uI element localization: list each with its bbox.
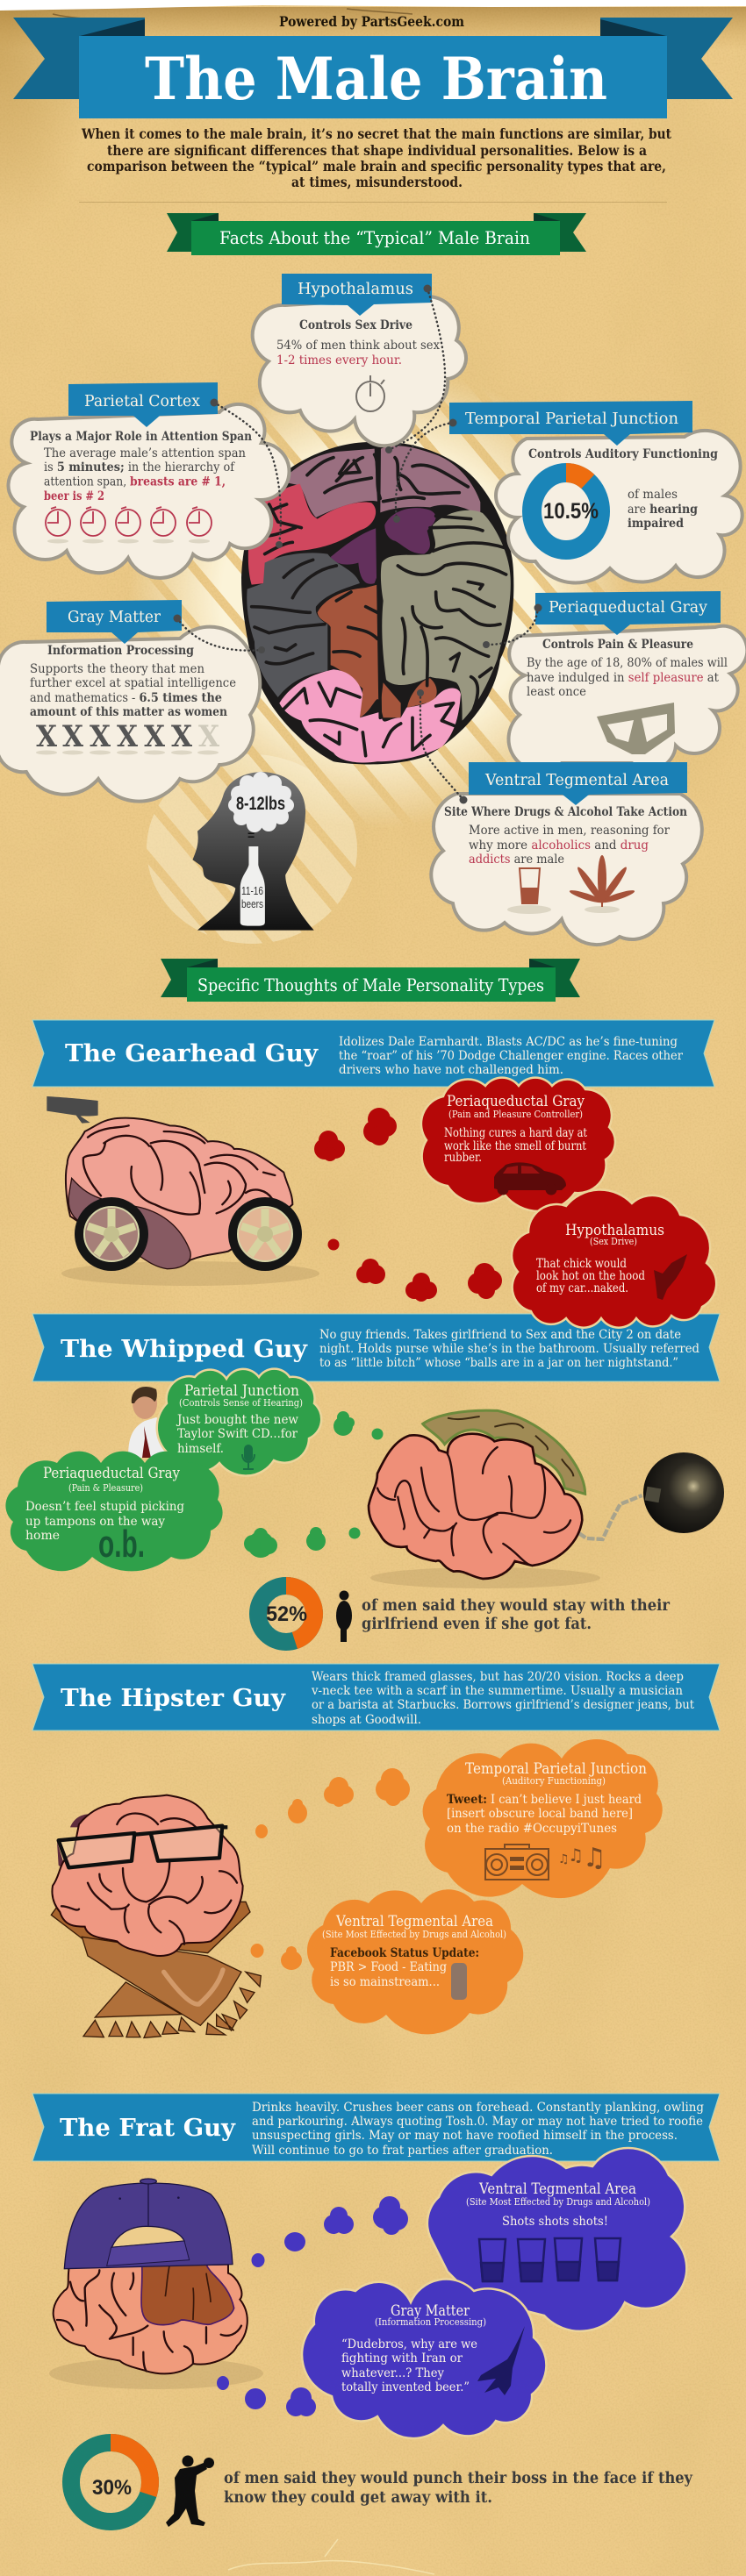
thought bubbles bbox=[217, 2196, 408, 2416]
intro text: there are significant differences that shape individual personalities. Below is a bbox=[107, 142, 647, 159]
intro text: When it comes to the male brain, it’s no secret that the main functions are similar, but bbox=[81, 125, 672, 142]
icon: row of X chromosomes: X bbox=[198, 719, 220, 754]
icon: reclining woman silhouette bbox=[654, 1254, 687, 1300]
thought cloud: periaqueductal gray: work like the smell of burnt bbox=[444, 1139, 586, 1153]
heading: The Frat Guy bbox=[60, 2114, 236, 2142]
donut chart: 30% bbox=[71, 2443, 150, 2522]
description: the “roar” of his ’70 Dodge Challenger engine. Races other bbox=[339, 1049, 683, 1063]
description: Drinks heavily. Crushes beer cans on forehead. Constantly planking, owling bbox=[252, 2101, 704, 2115]
thought cloud: ventral tegmental area: Ventral Tegmental Area bbox=[478, 2180, 636, 2198]
thought cloud: ventral tegmental area bbox=[427, 2148, 686, 2331]
icon: shot glass bbox=[507, 868, 551, 914]
diagonal stripes behind brain bbox=[137, 383, 618, 944]
panel: the whipped guy bbox=[5, 1314, 724, 1642]
panel: gray matter: and mathematics - 6.5 times the bbox=[30, 691, 222, 705]
icon: row of X chromosomes: X bbox=[144, 719, 166, 754]
right wheel bbox=[228, 1197, 302, 1271]
heading: The Whipped Guy bbox=[61, 1335, 308, 1363]
head silhouette: brain weight vs beers: 11-16 bbox=[241, 884, 263, 897]
panel: ventral tegmental area: More active in men, reasoning for bbox=[469, 824, 671, 838]
thought cloud: ventral tegmental area: PBR > Food - Eating bbox=[330, 1960, 447, 1974]
icon: o.b. logo: o.b. bbox=[98, 1523, 145, 1566]
panel: gray matter: Information Processing bbox=[47, 644, 195, 658]
statistic text: of men said they would punch their boss in the face if they bbox=[224, 2470, 693, 2487]
panel: temporal parietal junction: of males bbox=[628, 488, 678, 502]
panel: temporal parietal junction: Temporal Parietal Junction bbox=[465, 410, 678, 428]
thought cloud: hypothalamus: Hypothalamus bbox=[565, 1222, 664, 1239]
icon: stopwatch bbox=[356, 375, 384, 411]
intro text: at times, misunderstood. bbox=[291, 174, 463, 190]
panel: parietal cortex bbox=[8, 382, 289, 578]
panel: periaqueductal gray bbox=[509, 591, 746, 771]
thought cloud: gray matter: Gray Matter bbox=[391, 2302, 470, 2320]
icon: cannabis leaf bbox=[569, 855, 635, 913]
thought cloud: gray matter: totally invented beer.” bbox=[341, 2380, 470, 2394]
icon: beer can bbox=[451, 1963, 467, 2000]
description: shops at Goodwill. bbox=[312, 1713, 421, 1727]
thought bubbles bbox=[244, 1411, 383, 1558]
title banner bbox=[13, 18, 733, 118]
thought cloud: temporal parietal junction: Temporal Parietal Junction bbox=[465, 1760, 647, 1778]
panel: ventral tegmental area: Ventral Tegmental Area bbox=[484, 772, 669, 789]
thought cloud: parietal junction bbox=[157, 1369, 321, 1476]
icon: boombox and music notes: ♫ bbox=[583, 1843, 606, 1873]
section banner: specific thoughts bbox=[161, 959, 580, 1002]
statistic text: of men said they would stay with their bbox=[362, 1597, 671, 1615]
icon: boombox and music notes: ♫ bbox=[568, 1845, 584, 1866]
icon: boxer silhouette bbox=[166, 2456, 214, 2527]
panel: parietal cortex: attention span, breasts are # 1, bbox=[44, 475, 226, 489]
icon: fighter jet bbox=[477, 2326, 525, 2395]
panel: gray matter: Gray Matter bbox=[68, 609, 161, 626]
icon: row of X chromosomes: X bbox=[171, 719, 193, 754]
thought cloud: periaqueductal gray: (Pain & Pleasure) bbox=[68, 1482, 143, 1494]
panel: the gearhead guy bbox=[32, 1020, 716, 1328]
photo of man bbox=[128, 1387, 167, 1458]
panel: periaqueductal gray: have indulged in self pleasure at bbox=[527, 671, 720, 685]
icon: row of X chromosomes: X bbox=[36, 719, 58, 754]
section banner: facts bbox=[167, 213, 586, 255]
thought cloud: ventral tegmental area: is so mainstream... bbox=[330, 1975, 440, 1989]
donut chart: 10.5% bbox=[532, 473, 600, 550]
statistic text: know they could get away with it. bbox=[224, 2489, 492, 2507]
illustration: frat brain with backwards cap bbox=[49, 2179, 263, 2389]
description: night. Holds purse while she’s in the bathroom. Usually referred bbox=[319, 1342, 699, 1356]
main title: The Male Brain bbox=[145, 45, 607, 113]
thought cloud: periaqueductal gray: Nothing cures a hard day at bbox=[444, 1126, 587, 1140]
intro text bbox=[81, 125, 672, 190]
description: Will continue to go to frat parties after graduation. bbox=[252, 2144, 553, 2158]
dotted connector lines bbox=[174, 284, 542, 803]
description: Idolizes Dale Earnhardt. Blasts AC/DC as he’s fine-tuning bbox=[339, 1035, 678, 1049]
illustration: hipster brain with glasses and scarf bbox=[51, 1795, 261, 2037]
panel: parietal cortex: beer is # 2 bbox=[44, 489, 104, 503]
thought cloud: ventral tegmental area bbox=[307, 1889, 523, 2034]
thought cloud: periaqueductal gray bbox=[5, 1452, 223, 1571]
panel: gray matter bbox=[0, 600, 260, 802]
thought cloud: periaqueductal gray: up tampons on the way bbox=[25, 1515, 165, 1529]
thought cloud: gray matter: whatever...? They bbox=[341, 2366, 444, 2380]
panel: temporal parietal junction: are hearing bbox=[628, 503, 699, 517]
brain diagram bbox=[241, 442, 513, 764]
thought cloud: periaqueductal gray: home bbox=[25, 1529, 60, 1543]
thought cloud: gray matter: (Information Processing) bbox=[375, 2316, 486, 2328]
heading: The Gearhead Guy bbox=[65, 1039, 319, 1067]
panel: periaqueductal gray: least once bbox=[527, 685, 586, 699]
head silhouette: brain weight vs beers: beers bbox=[241, 897, 263, 910]
icon: boombox and music notes bbox=[485, 1843, 606, 1880]
panel: the frat guy bbox=[32, 2094, 720, 2527]
description: and parkouring. Always quoting Tosh.0. May or may not have tried to roofie bbox=[252, 2115, 703, 2129]
thought cloud: hypothalamus: look hot on the hood bbox=[536, 1269, 645, 1283]
panel: parietal cortex: is 5 minutes; in the hierarchy of bbox=[44, 460, 235, 475]
icon: briefs bbox=[597, 703, 675, 754]
thought cloud: gray matter: fighting with Iran or bbox=[341, 2351, 463, 2365]
thought cloud: gray matter bbox=[302, 2280, 546, 2438]
statistic text: girlfriend even if she got fat. bbox=[362, 1616, 592, 1633]
icon: car bbox=[494, 1162, 566, 1195]
panel: the hipster guy bbox=[32, 1664, 720, 2037]
panel: hypothalamus: Controls Sex Drive bbox=[299, 318, 412, 332]
thought cloud: temporal parietal junction: Tweet: bbox=[447, 1793, 487, 1807]
head silhouette: brain weight vs beers bbox=[193, 772, 314, 931]
thought cloud: parietal junction: Parietal Junction bbox=[184, 1382, 299, 1399]
panel: hypothalamus: 1-2 times every hour. bbox=[276, 353, 402, 367]
thought cloud: hypothalamus: (Sex Drive) bbox=[590, 1236, 637, 1247]
donut chart: 10.5%: 10.5% bbox=[543, 499, 599, 524]
panel: ventral tegmental area: why more alcoholics and drug bbox=[469, 838, 649, 853]
description: unsuspecting girls. May or may not have roofied himself in the process. bbox=[252, 2129, 678, 2143]
thought cloud: temporal parietal junction: [insert obscure local band here] bbox=[447, 1807, 633, 1821]
panel: hypothalamus: 54% of men think about sex bbox=[276, 339, 440, 353]
panel: parietal cortex: Plays a Major Role in Attention Span bbox=[30, 430, 252, 444]
thought cloud: parietal junction: Just bought the new bbox=[176, 1413, 298, 1427]
donut chart: 52% bbox=[258, 1586, 314, 1642]
icon: row of X chromosomes bbox=[36, 719, 220, 754]
panel: ventral tegmental area: Site Where Drugs & Alcohol Take Action bbox=[444, 805, 687, 819]
powered by line: Powered by PartsGeek.com bbox=[279, 13, 465, 30]
thought cloud: gray matter: “Dudebros, why are we bbox=[341, 2337, 477, 2351]
panel: gray matter: Supports the theory that men bbox=[30, 662, 204, 676]
panel: periaqueductal gray: By the age of 18, 80% of males will bbox=[527, 656, 728, 670]
panel: parietal cortex: The average male’s attention span bbox=[44, 446, 246, 460]
description: or a barista at Starbucks. Borrows girlfriend’s designer jeans, but bbox=[312, 1698, 694, 1712]
description: drivers who have not challenged him. bbox=[339, 1063, 563, 1077]
panel: parietal cortex: Parietal Cortex bbox=[84, 393, 200, 410]
banner text: Specific Thoughts of Male Personality Types bbox=[197, 975, 544, 995]
icon: four shot glasses bbox=[479, 2238, 620, 2281]
thought cloud: periaqueductal gray bbox=[421, 1078, 615, 1211]
thought cloud: parietal junction: himself. bbox=[177, 1442, 224, 1456]
panel: hypothalamus: Hypothalamus bbox=[298, 281, 413, 298]
donut chart: 30%: 30% bbox=[92, 2476, 132, 2500]
thought cloud: temporal parietal junction: on the radio #OccupyiTunes bbox=[447, 1822, 617, 1836]
banner text: Facts About the “Typical” Male Brain bbox=[219, 228, 530, 248]
thought cloud: ventral tegmental area: (Site Most Effected by Drugs and Alcohol) bbox=[466, 2196, 650, 2208]
panel: gray matter: further excel at spatial intelligence bbox=[30, 676, 236, 690]
thought cloud: ventral tegmental area: Ventral Tegmental Area bbox=[335, 1913, 493, 1930]
left wheel bbox=[75, 1197, 148, 1271]
panel: periaqueductal gray: Periaqueductal Gray bbox=[549, 599, 707, 617]
panel: temporal parietal junction: Controls Auditory Functioning bbox=[528, 447, 719, 461]
description: Wears thick framed glasses, but has 20/20 vision. Rocks a deep bbox=[312, 1670, 684, 1684]
description bbox=[339, 1035, 683, 1077]
icon: row of X chromosomes: X bbox=[117, 719, 139, 754]
thought cloud: temporal parietal junction: (Auditory Functioning) bbox=[502, 1775, 606, 1787]
intro text: comparison between the “typical” male brain and specific personality types that are, bbox=[87, 158, 666, 175]
thought cloud: ventral tegmental area: (Site Most Effected by Drugs and Alcohol) bbox=[322, 1929, 506, 1940]
thought cloud: temporal parietal junction: I can’t believe I just heard bbox=[491, 1793, 642, 1807]
icon: row of X chromosomes: X bbox=[62, 719, 84, 754]
illustration: brain car bbox=[47, 1096, 319, 1286]
head silhouette: brain weight vs beers: 8-12lbs bbox=[236, 794, 285, 814]
head silhouette: brain weight vs beers: = bbox=[247, 828, 255, 842]
heading: The Hipster Guy bbox=[61, 1684, 286, 1712]
description bbox=[319, 1328, 699, 1370]
panel: hypothalamus bbox=[253, 274, 466, 446]
icon: row of X chromosomes: X bbox=[90, 719, 111, 754]
thought cloud: periaqueductal gray: rubber. bbox=[444, 1151, 482, 1165]
panel: gray matter: amount of this matter as women bbox=[30, 705, 227, 719]
panel: ventral tegmental area bbox=[431, 762, 702, 945]
icon: five clocks bbox=[46, 507, 212, 544]
icon: boombox and music notes: ♫ bbox=[558, 1852, 570, 1866]
thought cloud: hypothalamus: That chick would bbox=[536, 1257, 627, 1271]
thought cloud: periaqueductal gray: (Pain and Pleasure Controller) bbox=[448, 1109, 583, 1120]
statistic text bbox=[362, 1597, 671, 1633]
thought cloud: ventral tegmental area: Facebook Status Update: bbox=[330, 1946, 479, 1960]
thought cloud: periaqueductal gray: Doesn’t feel stupid picking bbox=[25, 1500, 184, 1514]
thought cloud: hypothalamus: of my car...naked. bbox=[536, 1281, 628, 1295]
glasses bbox=[59, 1826, 227, 1867]
illustration: whipped brain with ball and chain bbox=[369, 1410, 724, 1588]
icon: microphone bbox=[242, 1445, 255, 1469]
thought cloud: periaqueductal gray: Periaqueductal Gray bbox=[447, 1093, 585, 1110]
description bbox=[252, 2101, 704, 2158]
description: to as “little bitch” whose “balls are in a jar on her nightstand.” bbox=[319, 1356, 678, 1370]
description: No guy friends. Takes girlfriend to Sex and the City 2 on date bbox=[319, 1328, 681, 1342]
thought cloud: parietal junction: (Controls Sense of Hearing) bbox=[179, 1397, 303, 1409]
panel: temporal parietal junction bbox=[449, 401, 742, 582]
thought bubbles bbox=[251, 1768, 410, 1970]
thought cloud: ventral tegmental area: Shots shots shots! bbox=[502, 2215, 608, 2229]
thought cloud: temporal parietal junction bbox=[423, 1739, 663, 1898]
thought cloud: parietal junction: Taylor Swift CD...for bbox=[177, 1427, 298, 1441]
panel: ventral tegmental area: addicts are male bbox=[469, 853, 564, 867]
thought bubbles bbox=[314, 1108, 502, 1302]
panel: temporal parietal junction: impaired bbox=[628, 517, 685, 531]
description: v-neck tee with a scarf in the summertime. Usually a musician bbox=[311, 1684, 683, 1698]
panel: periaqueductal gray: Controls Pain & Pleasure bbox=[542, 638, 693, 652]
thought cloud: periaqueductal gray: Periaqueductal Gray bbox=[43, 1465, 180, 1482]
description bbox=[311, 1670, 694, 1727]
icon: overweight woman bbox=[336, 1591, 352, 1642]
thought cloud: hypothalamus bbox=[512, 1190, 716, 1328]
statistic text bbox=[224, 2470, 693, 2507]
donut chart: 52%: 52% bbox=[266, 1602, 307, 1626]
